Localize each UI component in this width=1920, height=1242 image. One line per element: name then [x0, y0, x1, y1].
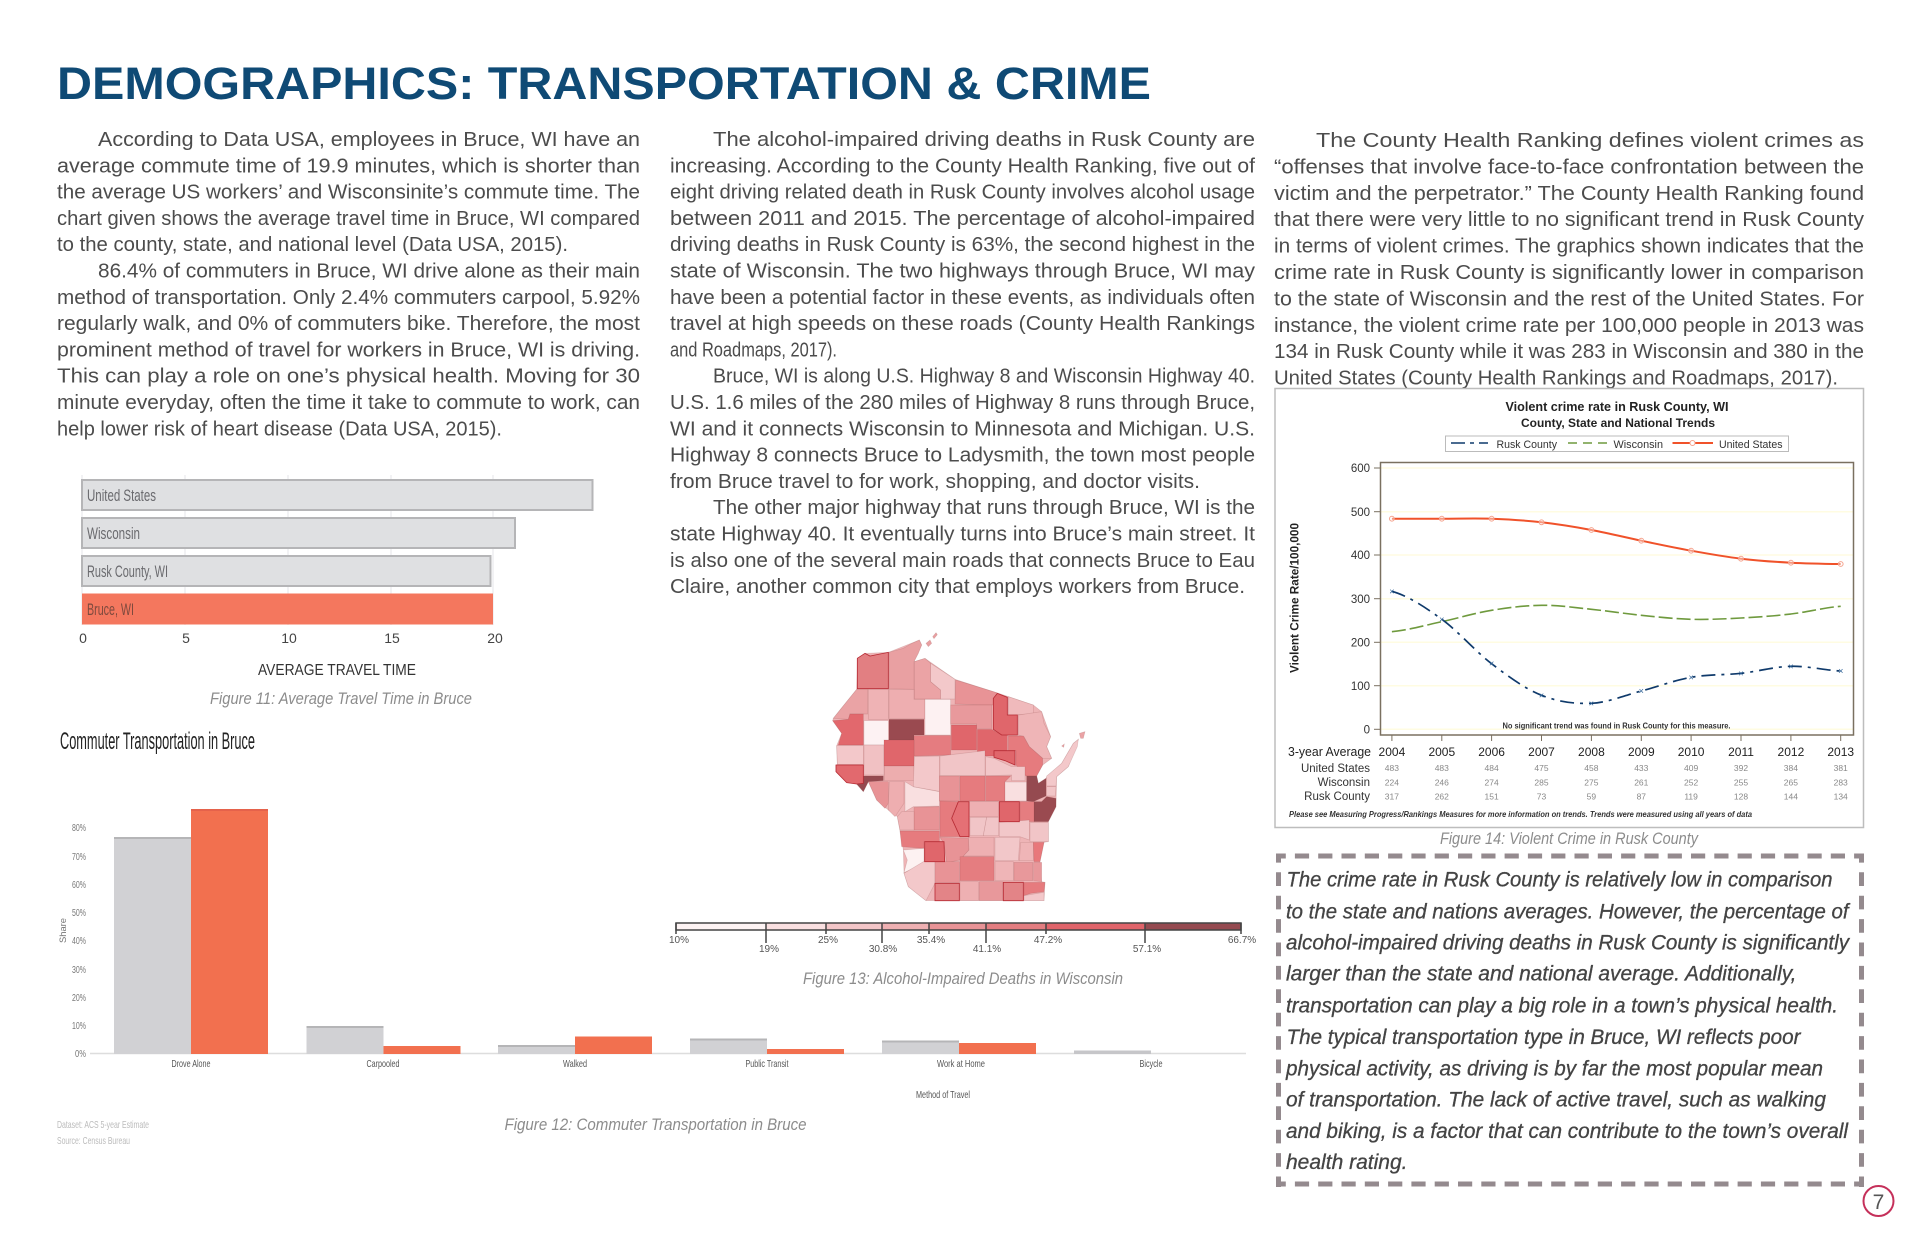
chart legend [1446, 436, 1788, 452]
text block: alcohol and highways column: have been a potential factor in these events, as individuals often [670, 286, 1255, 309]
source note [57, 1119, 149, 1147]
bar: Wisconsin: Wisconsin [87, 524, 140, 543]
legend labels: 19% [759, 944, 779, 955]
y axis labels: 30% [72, 965, 86, 976]
text block: violent crime column: “offenses that involve face-to-face confrontation between the [1274, 155, 1864, 178]
text block: alcohol and highways column: is also one of the several main roads that connects Bruce to Eau [670, 549, 1255, 572]
bars: drove alone [114, 809, 268, 1054]
data table: 283 [1834, 778, 1848, 788]
chart legend: Rusk County [1496, 439, 1557, 451]
text block: alcohol and highways column: U.S. 1.6 miles of the 280 miles of Highway 8 runs through Bruce, [670, 391, 1255, 414]
callout text: transportation can play a big role in a town’s physical health. [1286, 994, 1838, 1017]
data table: 2009 [1628, 745, 1655, 759]
bars: work at home [882, 1040, 1036, 1054]
data table: 381 [1834, 763, 1848, 773]
line: Rusk County: × [1589, 698, 1594, 708]
legend labels: 10% [669, 935, 689, 946]
chart legend: Wisconsin [1614, 439, 1663, 451]
text block: alcohol and highways column: The other major highway that runs through Bruce, WI is the [713, 496, 1255, 519]
line: Rusk County: × [1489, 659, 1494, 669]
data table: 3-year Average [1288, 745, 1371, 759]
line: Rusk County [1389, 586, 1843, 708]
text block: commute column: According to Data USA, employees in Bruce, WI have an [98, 128, 640, 151]
callout text: larger than the state and national average. Additionally, [1286, 963, 1796, 986]
x axis labels [172, 1058, 1163, 1101]
text block: alcohol and highways column: The alcohol-impaired driving deaths in Rusk County are [713, 128, 1255, 151]
text block: violent crime column: victim and the perpetrator.” The County Health Ranking found [1274, 182, 1864, 205]
text block: violent crime column: The County Health Ranking defines violent crimes as [1316, 129, 1864, 152]
data table: 2007 [1528, 745, 1555, 759]
text block: commute column: This can play a role on one’s physical health. Moving for 30 [57, 365, 640, 388]
chart heading: Violent crime rate in Rusk County, WI [1506, 400, 1728, 414]
bars: walked [498, 1036, 652, 1054]
data table: 433 [1634, 763, 1649, 773]
legend labels: 25% [818, 935, 838, 946]
line: Rusk County: × [1738, 668, 1744, 678]
data table: 274 [1485, 778, 1499, 788]
axis tick labels: 10 [281, 630, 297, 646]
y tick labels: 300 [1351, 594, 1370, 606]
text block: commute column: regularly walk, and 0% of commuters bike. Therefore, the most [57, 312, 640, 335]
callout text: The crime rate in Rusk County is relatively low in comparison [1286, 869, 1832, 892]
data table: 2011 [1728, 745, 1754, 759]
caption: figure 13: Figure 13: Alcohol-Impaired Deaths in Wisconsin [803, 969, 1123, 988]
line: Rusk County: × [1389, 586, 1395, 596]
data table: 134 [1834, 792, 1848, 802]
bars: public transit [690, 1038, 844, 1054]
data table: 484 [1485, 763, 1499, 773]
x axis labels: Public Transit [746, 1058, 789, 1070]
data table: 409 [1684, 763, 1698, 773]
data table: 73 [1537, 792, 1546, 802]
source note: Source: Census Bureau [57, 1135, 130, 1147]
text block: alcohol and highways column [670, 128, 1256, 598]
text block: alcohol and highways column: eight driving related death in Rusk County involves alcohol usage [670, 181, 1255, 204]
page number: 7 [1873, 1191, 1884, 1214]
y tick labels: 200 [1351, 638, 1370, 650]
text block: violent crime column: crime rate in Rusk County is significantly lower in comparison [1274, 261, 1864, 284]
chart: commuter transportation [57, 728, 1246, 1147]
callout text: and biking, is a factor that can contribute to the town’s overall [1286, 1120, 1849, 1143]
data table: 317 [1385, 792, 1399, 802]
callout text: alcohol-impaired driving deaths in Rusk County is significantly [1286, 931, 1850, 954]
data table [1288, 745, 1854, 819]
line: United States [1390, 516, 1843, 566]
title: DEMOGRAPHICS: TRANSPORTATION & CRIME [57, 58, 1151, 109]
text block: violent crime column: to the state of Wisconsin and the rest of the United States. For [1274, 287, 1864, 310]
legend labels: 30.8% [869, 944, 897, 955]
bar: United States: United States [87, 486, 156, 505]
x axis labels: Walked [563, 1058, 587, 1070]
caption: figure 14: Figure 14: Violent Crime in Rusk County [1440, 829, 1699, 848]
x axis labels: Drove Alone [172, 1058, 211, 1070]
data table: 483 [1435, 763, 1449, 773]
caption: figure 12: Figure 12: Commuter Transportation in Bruce [504, 1115, 806, 1134]
data table: Wisconsin [1318, 777, 1370, 789]
bars: bicycle [1074, 1050, 1151, 1054]
data table: 392 [1734, 763, 1748, 773]
y axis labels: 80% [72, 823, 86, 834]
data table: 275 [1584, 778, 1599, 788]
data table: 128 [1734, 792, 1748, 802]
callout text: physical activity, as driving is by far the most popular mean [1285, 1057, 1823, 1080]
callout text: to the state and nations averages. However, the percentage of [1286, 900, 1851, 923]
map: Wisconsin counties alcohol-impaired deaths [833, 633, 1085, 901]
axis tick labels: 0 [79, 630, 87, 646]
text block: alcohol and highways column: from Bruce travel to for work, shopping, and doctor visits. [670, 470, 1200, 493]
legend labels: 47.2% [1034, 935, 1062, 946]
data table: 87 [1637, 792, 1646, 802]
y axis title: Violent Crime Rate/100,000 [1288, 523, 1302, 673]
text block: commute column: average commute time of 19.9 minutes, which is shorter than [57, 154, 640, 177]
x axis labels: Bicycle [1140, 1058, 1163, 1070]
text block: alcohol and highways column: and Roadmaps, 2017). [670, 338, 837, 361]
text block: violent crime column: instance, the violent crime rate per 100,000 people in 2013 was [1274, 314, 1864, 337]
text block: alcohol and highways column: Bruce, WI is along U.S. Highway 8 and Wisconsin Highway 40. [713, 365, 1255, 388]
map legend scale [669, 923, 1256, 955]
chart legend: United States [1719, 439, 1783, 451]
text block: commute column: the average US workers’ and Wisconsinite’s commute time. The [57, 181, 640, 204]
y axis labels: 70% [72, 852, 86, 863]
y axis title: Share [58, 918, 68, 943]
text block: alcohol and highways column: driving deaths in Rusk County is 63%, the second highest in the [670, 233, 1255, 256]
callout text: of transportation. The lack of active travel, such as walking [1286, 1089, 1826, 1112]
text block: commute column: method of transportation. Only 2.4% commuters carpool, 5.92% [57, 286, 640, 309]
x axis labels: Work at Home [937, 1058, 985, 1070]
text block: violent crime column [1274, 129, 1865, 390]
y tick labels: 100 [1351, 681, 1370, 693]
text block: violent crime column: United States (County Health Rankings and Roadmaps, 2017). [1274, 367, 1838, 390]
bar: United States [82, 480, 592, 510]
data table: 2013 [1827, 745, 1854, 759]
y axis labels: 0% [75, 1049, 86, 1060]
table footnote: Please see Measuring Progress/Rankings Measures for more information on trends. Trends were measured using all years of data [1289, 810, 1753, 819]
bar: Wisconsin [82, 518, 515, 548]
bars: carpooled [306, 1026, 460, 1054]
legend labels: 66.7% [1228, 935, 1256, 946]
text block: violent crime column: in terms of violent crimes. The graphics shown indicates that the [1274, 235, 1864, 258]
y axis labels: 50% [72, 908, 86, 919]
bar: Rusk County: Rusk County, WI [87, 562, 168, 581]
data table: 144 [1784, 792, 1798, 802]
y axis labels [72, 823, 86, 1060]
chart panel: violent crime trends [1275, 388, 1864, 828]
text block: alcohol and highways column: Highway 8 connects Bruce to Ladysmith, the town most people [670, 444, 1255, 467]
data table: 2006 [1478, 745, 1505, 759]
bar: Bruce: Bruce, WI [87, 600, 134, 619]
callout text: The typical transportation type in Bruce, WI reflects poor [1286, 1026, 1801, 1049]
data table: 246 [1435, 778, 1449, 788]
y tick labels: 600 [1351, 463, 1370, 475]
text block: commute column: to the county, state, and national level (Data USA, 2015). [57, 233, 568, 256]
data table: 261 [1634, 778, 1649, 788]
data table: 475 [1534, 763, 1549, 773]
text block: commute column: minute everyday, often the time it take to commute to work, can [57, 391, 640, 414]
x axis labels: Method of Travel [916, 1089, 970, 1101]
data table: 2008 [1578, 745, 1605, 759]
axis tick labels: 20 [487, 630, 503, 646]
line: Rusk County: × [1838, 666, 1843, 676]
y axis labels: 20% [72, 993, 86, 1004]
data table: 2005 [1428, 745, 1455, 759]
data table: 2012 [1778, 745, 1805, 759]
legend labels: 41.1% [973, 944, 1001, 955]
data table: 2004 [1379, 745, 1406, 759]
y tick labels [1351, 463, 1370, 736]
chart: average travel time bars [79, 475, 592, 679]
data table: 262 [1435, 792, 1449, 802]
text block: alcohol and highways column: between 2011 and 2015. The percentage of alcohol-impaired [670, 207, 1255, 230]
data table: 384 [1784, 763, 1798, 773]
text block: alcohol and highways column: Claire, another common city that employs workers from Bruce. [670, 575, 1245, 598]
line: Rusk County: × [1788, 661, 1794, 671]
y tick labels: 500 [1351, 507, 1370, 519]
plot area [1351, 462, 1854, 741]
line: Wisconsin [1392, 605, 1841, 632]
data table: 265 [1784, 778, 1798, 788]
chart title: Commuter Transportation in Bruce [60, 728, 255, 755]
data table: 483 [1385, 763, 1399, 773]
text block: alcohol and highways column: state of Wisconsin. The two highways through Bruce, WI may [670, 260, 1256, 282]
line: Rusk County: × [1639, 686, 1644, 696]
data table: 224 [1385, 778, 1399, 788]
chart heading [1506, 400, 1728, 430]
callout: summary box [1276, 854, 1864, 1187]
data table: 252 [1684, 778, 1698, 788]
data table: United States [1301, 763, 1370, 775]
chart heading: County, State and National Trends [1521, 418, 1715, 430]
legend labels: 57.1% [1133, 944, 1161, 955]
callout text: health rating. [1286, 1151, 1408, 1174]
axis tick labels: 15 [384, 630, 400, 646]
legend labels: 35.4% [917, 935, 945, 946]
axis title: AVERAGE TRAVEL TIME [258, 662, 416, 679]
legend labels [669, 935, 1256, 955]
text block: alcohol and highways column: travel at high speeds on these roads (County Health Rankings [670, 312, 1255, 335]
callout text [1285, 869, 1851, 1174]
annotation: No significant trend was found in Rusk County for this measure. [1502, 720, 1730, 730]
line: Rusk County: × [1688, 672, 1694, 682]
caption: figure 11: Figure 11: Average Travel Time in Bruce [210, 689, 472, 708]
y axis labels: 40% [72, 936, 86, 947]
bar: Bruce [82, 594, 493, 624]
text block: commute column: help lower risk of heart disease (Data USA, 2015). [57, 417, 502, 440]
y tick labels: 0 [1364, 724, 1370, 736]
text block: commute column: chart given shows the average travel time in Bruce, WI compared [57, 207, 640, 230]
text block: violent crime column: that there were very little to no significant trend in Rusk County [1274, 208, 1865, 231]
x axis labels: Carpooled [366, 1058, 400, 1070]
data table: 59 [1587, 792, 1596, 802]
line: Rusk County: × [1439, 614, 1444, 624]
text block: commute column [57, 128, 640, 440]
axis tick labels: 5 [182, 630, 190, 646]
data table: 2010 [1678, 745, 1705, 759]
text block: violent crime column: 134 in Rusk County while it was 283 in Wisconsin and 380 in the [1274, 340, 1864, 363]
bar: Rusk County [82, 556, 490, 586]
data table: 119 [1684, 792, 1698, 802]
page number [1864, 1186, 1894, 1216]
text block: commute column: 86.4% of commuters in Bruce, WI drive alone as their main [98, 260, 640, 282]
data table: 458 [1584, 763, 1599, 773]
y tick labels: 400 [1351, 550, 1370, 562]
line: Rusk County: × [1539, 690, 1544, 700]
y axis labels: 60% [72, 880, 86, 891]
data table: 151 [1485, 792, 1499, 802]
source note: Dataset: ACS 5-year Estimate [57, 1119, 149, 1131]
text block: alcohol and highways column: increasing. According to the County Health Ranking, five out of [670, 154, 1255, 177]
text block: alcohol and highways column: state Highway 40. It eventually turns into Bruce’s main street. It [670, 522, 1255, 546]
text block: alcohol and highways column: WI and it connects Wisconsin to Minnesota and Michigan. U.S. [670, 417, 1255, 440]
axis tick labels [79, 630, 503, 646]
data table: 285 [1534, 778, 1549, 788]
data table: 255 [1734, 778, 1748, 788]
data table: Rusk County [1304, 791, 1370, 803]
text block: commute column: prominent method of travel for workers in Bruce, WI is driving. [57, 338, 640, 361]
y axis labels: 10% [72, 1021, 86, 1032]
